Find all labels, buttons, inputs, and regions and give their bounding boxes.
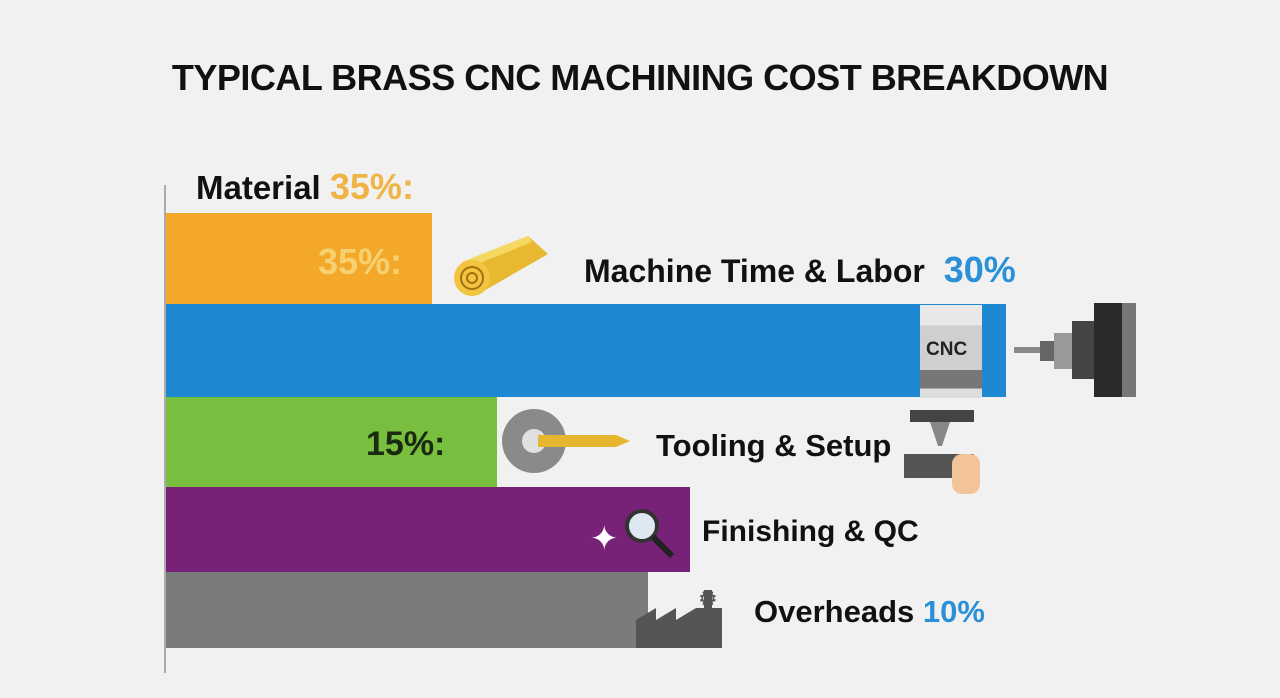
bar: machine time — [166, 304, 1006, 397]
bar: tooling: 15%: — [366, 425, 445, 463]
label: machine time: Machine Time & Labor 30% — [584, 249, 1016, 290]
bar: finishing — [166, 487, 690, 572]
icon: CNC box: CNC — [926, 339, 967, 360]
icon: brass rod — [454, 236, 548, 296]
bar: overheads — [166, 572, 648, 648]
title: TYPICAL BRASS CNC MACHINING COST BREAKDOWN — [172, 57, 1108, 98]
axis line — [164, 185, 166, 673]
bar: tooling — [166, 397, 497, 487]
icon: spindle — [1014, 303, 1136, 397]
icon: cutter and drill — [502, 409, 630, 473]
icon: machine with hand — [904, 410, 980, 494]
icon: magnifier — [590, 509, 674, 558]
icon: CNC box — [920, 305, 982, 398]
label: tooling: Tooling & Setup — [656, 428, 891, 463]
label: material: Material 35%: — [196, 166, 414, 207]
icon: factory — [636, 586, 722, 648]
label: finishing: Finishing & QC — [702, 515, 919, 548]
icon: magnifier: ✦ — [590, 520, 618, 558]
label: overheads: Overheads 10% — [754, 594, 985, 629]
icon: factory: ⚙ — [698, 586, 718, 611]
bar: material: 35%: — [318, 241, 402, 282]
bar: material — [166, 213, 432, 304]
